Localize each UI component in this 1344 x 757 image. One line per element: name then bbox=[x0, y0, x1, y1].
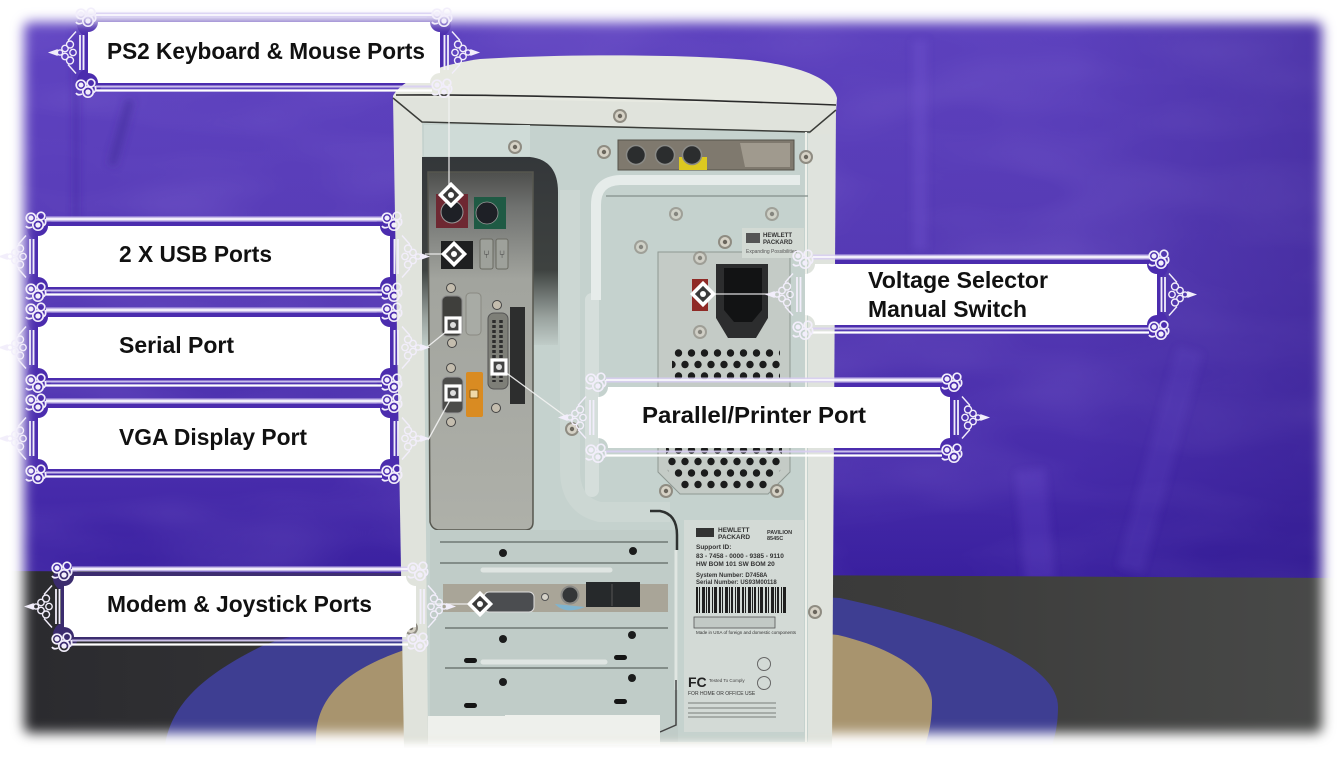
label: VGA Display Port bbox=[0, 394, 428, 483]
glass disc bbox=[165, 595, 1058, 745]
IO plate bbox=[428, 172, 533, 530]
callout leader lines bbox=[425, 84, 772, 604]
rating label: Tested To Comply bbox=[709, 678, 745, 683]
parallel port bbox=[488, 300, 525, 412]
case top cap bbox=[393, 55, 837, 112]
rating label: HW BOM 101 SW BOM 20 bbox=[696, 561, 775, 568]
label: Voltage Selector Manual Switch: Voltage Selector bbox=[868, 267, 1048, 293]
rating label: PACKARD bbox=[718, 534, 750, 541]
modem and joystick card bbox=[443, 582, 668, 612]
rating label: System Number: D7458A bbox=[696, 573, 768, 579]
rating label: FOR HOME OR OFFICE USE bbox=[688, 691, 756, 697]
label: Voltage Selector Manual Switch bbox=[767, 250, 1195, 339]
rating label bbox=[684, 520, 804, 732]
power supply bbox=[658, 252, 790, 494]
label: Modem & Joystick Ports bbox=[26, 562, 454, 651]
slot opening curve bbox=[650, 511, 677, 550]
rating label: PAVILION bbox=[767, 530, 792, 536]
rating label: Support ID: bbox=[696, 544, 731, 551]
USB ports: ⑂ bbox=[483, 249, 490, 261]
VGA port bbox=[442, 364, 483, 426]
voltage switch bbox=[692, 279, 708, 311]
audio jack plate bbox=[618, 140, 794, 170]
rating label: 8545C bbox=[767, 536, 783, 542]
rating label: HEWLETT bbox=[718, 527, 749, 534]
computer case bbox=[393, 55, 837, 748]
label: PS2 Keyboard & Mouse Ports bbox=[50, 8, 478, 97]
label: Parallel/Printer Port bbox=[560, 373, 988, 462]
label: 2 X USB Ports: 2 X USB Ports bbox=[119, 241, 272, 267]
label: Serial Port bbox=[0, 303, 428, 392]
HP badge: HEWLETT bbox=[763, 233, 792, 239]
port markers bbox=[440, 184, 714, 615]
USB ports bbox=[441, 239, 508, 269]
rating label: Serial Number: US93M00118 bbox=[696, 580, 777, 586]
screws bbox=[404, 109, 822, 635]
rating label: Made in USA of foreign and domestic components bbox=[696, 630, 797, 635]
label: VGA Display Port: VGA Display Port bbox=[119, 424, 307, 450]
label: Serial Port: Serial Port bbox=[119, 332, 234, 358]
label: Voltage Selector Manual Switch: Manual Switch bbox=[868, 296, 1027, 322]
label: Modem & Joystick Ports: Modem & Joystick Ports bbox=[107, 591, 372, 617]
tan pedestal bbox=[316, 631, 932, 745]
vent holes bbox=[666, 347, 782, 491]
label backing bands bbox=[27, 11, 1168, 648]
slot opening bbox=[422, 157, 558, 345]
label: Parallel/Printer Port: Parallel/Printer Port bbox=[642, 402, 866, 428]
inner back panel bbox=[422, 123, 810, 742]
label: PS2 Keyboard & Mouse Ports: PS2 Keyboard & Mouse Ports bbox=[107, 38, 425, 64]
HP badge bbox=[742, 228, 804, 258]
USB ports: ⑂ bbox=[499, 249, 505, 261]
label: 2 X USB Ports bbox=[0, 212, 428, 301]
rating label: 83 - 7458 - 0000 - 9385 - 9110 bbox=[696, 553, 784, 560]
bracket bbox=[570, 190, 670, 512]
HP badge: PACKARD bbox=[763, 240, 793, 246]
rating label: FC bbox=[688, 674, 707, 690]
PS2 ports bbox=[436, 194, 506, 229]
top plate tab bbox=[424, 125, 530, 156]
serial port bbox=[442, 284, 481, 348]
HP badge: Expanding Possibilities bbox=[746, 249, 798, 255]
expansion slot area bbox=[436, 530, 668, 708]
case body frame bbox=[393, 97, 836, 748]
